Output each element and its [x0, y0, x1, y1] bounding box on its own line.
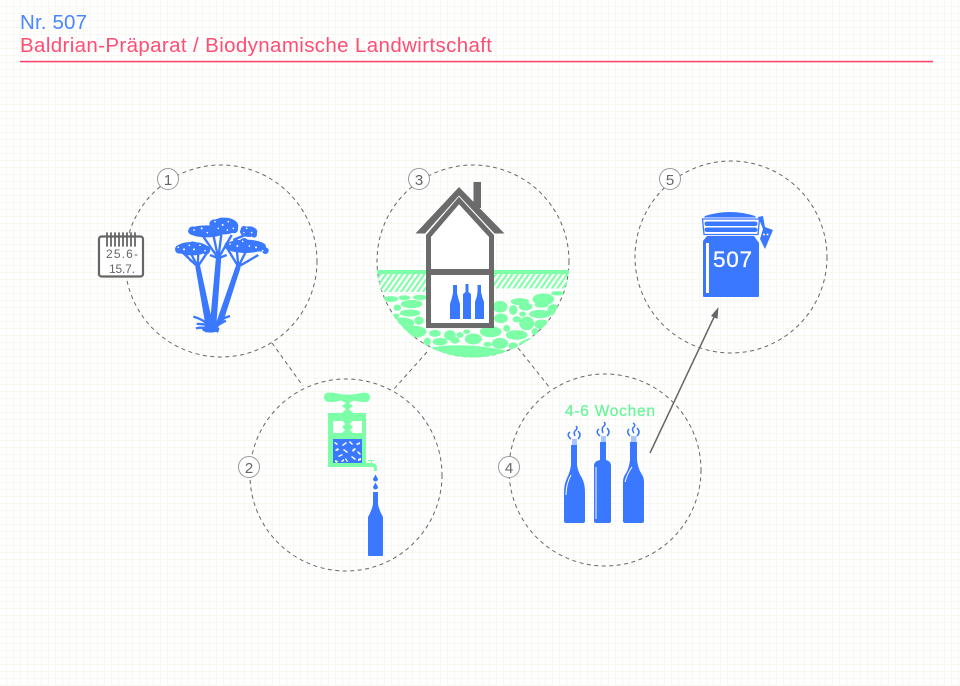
title: Baldrian-Präparat / Biodynamische Landwirtschaft — [20, 34, 492, 57]
panel: step 2 pressing — [238, 379, 442, 571]
badge: number 2 — [238, 456, 260, 478]
badge: number 5 — [660, 168, 680, 190]
panel: step 3 burial under house — [376, 164, 570, 358]
badge: number 4 — [498, 456, 520, 478]
panel: step 4 fermenting — [498, 374, 701, 566]
icon: valerian plant — [175, 218, 269, 333]
badge: number 3: 3 — [415, 172, 423, 189]
panel: step 1 harvest — [99, 165, 317, 357]
badge: number 3 — [408, 168, 430, 190]
title — [20, 11, 933, 62]
title: Nr. 507 — [20, 11, 87, 34]
icon: buried bottles — [450, 284, 484, 319]
badge: number 4: 4 — [505, 460, 513, 477]
badge: number 2: 2 — [245, 460, 253, 477]
connector: step 3 to step 4 — [518, 348, 550, 388]
connector: step 2 to step 3 — [394, 352, 427, 389]
badge: number 5: 5 — [666, 172, 674, 189]
badge: number 1 — [158, 168, 178, 190]
icon: bottle — [368, 492, 383, 556]
ground with stones — [376, 270, 570, 358]
badge: number 1: 1 — [164, 172, 172, 189]
icon: drops — [373, 474, 378, 490]
icon: calendar — [99, 233, 143, 276]
icon: house — [416, 182, 504, 326]
panel: step 5 storage — [635, 161, 827, 353]
icon: calendar: 15.7. — [109, 262, 135, 276]
label: duration: 4-6 Wochen — [565, 403, 655, 420]
icon: jar — [702, 212, 773, 297]
connector: step 1 to step 2 — [272, 343, 303, 386]
icon: calendar: 25.6- — [106, 247, 138, 261]
icon: three bottles with vapour — [564, 422, 644, 523]
icon: jar: 507 — [713, 247, 752, 272]
icon: press — [324, 392, 383, 556]
arrow: bottles to jar — [650, 307, 718, 453]
